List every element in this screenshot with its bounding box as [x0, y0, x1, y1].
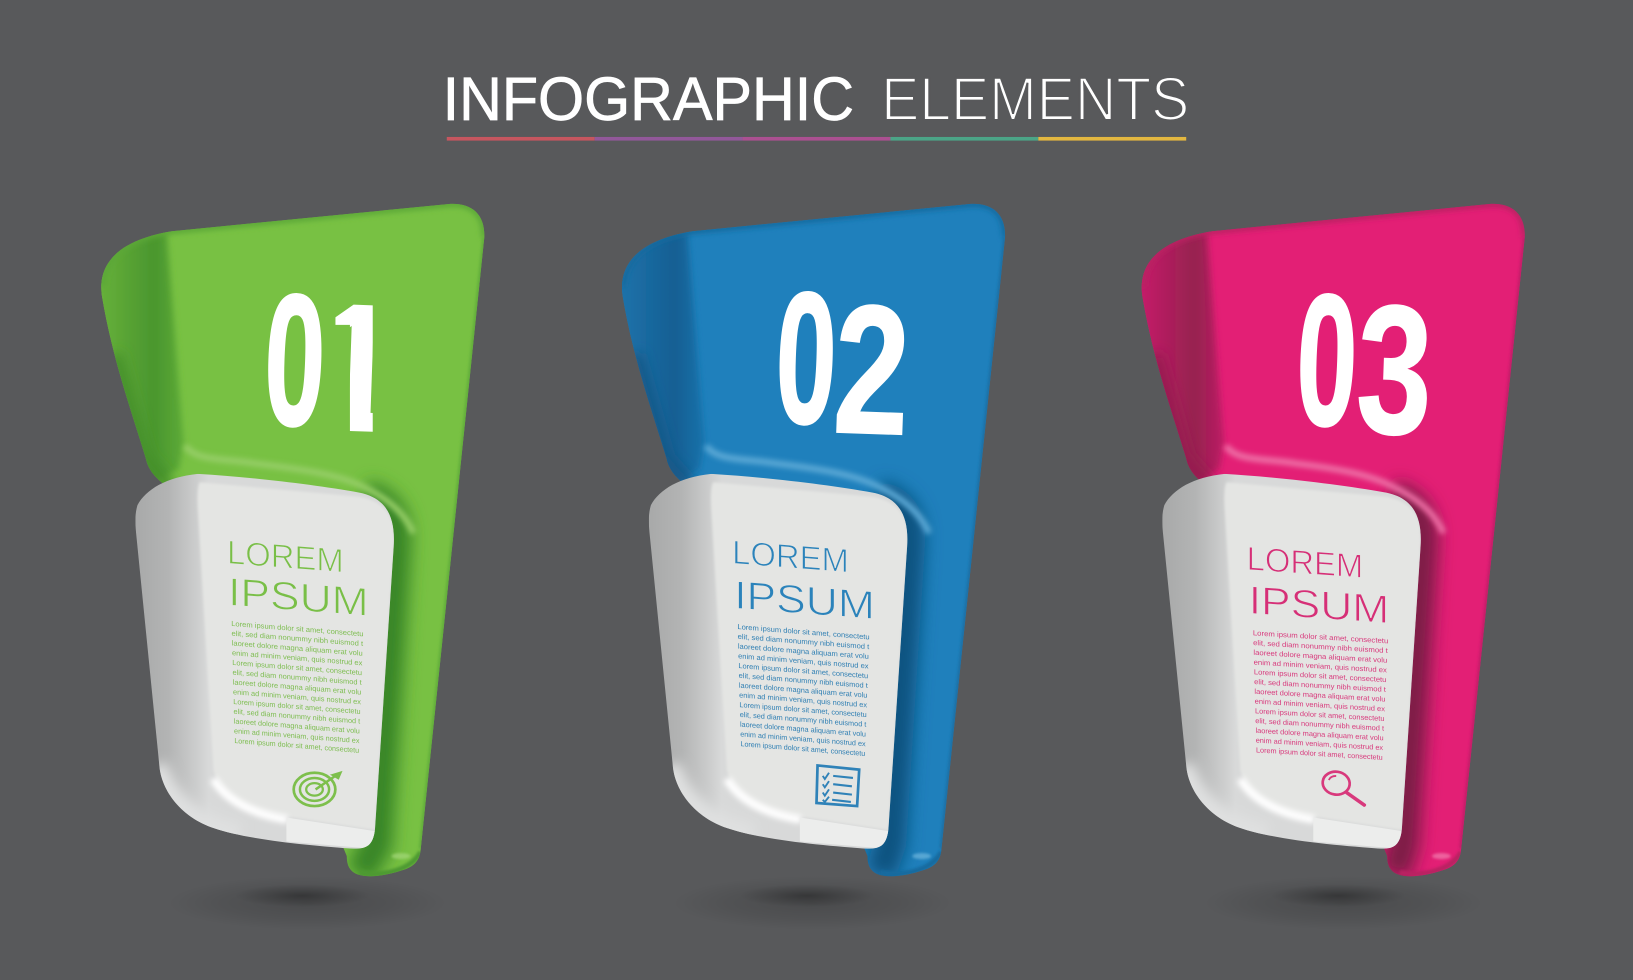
- title underline in four colours: [447, 137, 1186, 141]
- body text: elit, sed diam nonummy nibh euismod t: [234, 707, 360, 726]
- white card: [648, 474, 908, 849]
- body text: Lorem ipsum dolor sit amet, consectetu: [231, 619, 363, 638]
- heading: LOREM IPSUM: [227, 534, 369, 625]
- heading: LOREM IPSUM: IPSUM: [734, 573, 875, 628]
- body text: elit, sed diam nonummy nibh euismod t: [231, 629, 363, 648]
- heading: LOREM IPSUM: IPSUM: [1249, 578, 1389, 632]
- body text: Lorem ipsum dolor sit amet, consectetu: [738, 661, 868, 680]
- number 01: 0: [261, 255, 329, 466]
- floor shadow: [672, 876, 953, 930]
- body text: elit, sed diam nonummy nibh euismod t: [1253, 638, 1388, 655]
- body text: elit, sed diam nonummy nibh euismod t: [1255, 716, 1384, 733]
- number 02: [772, 253, 913, 474]
- body text: laoreet dolore magna aliquam erat volu: [233, 677, 361, 697]
- body text: Lorem ipsum dolor sit amet, consectetu: [737, 622, 870, 641]
- heading: LOREM IPSUM: LOREM: [732, 534, 849, 580]
- body text: Lorem ipsum dolor sit amet, consectetu: [1255, 706, 1385, 723]
- heading: LOREM IPSUM: IPSUM: [228, 570, 369, 625]
- body text: laoreet dolore magna aliquam erat volu: [738, 642, 869, 661]
- green tag body: [101, 204, 484, 876]
- body text: enim ad minim veniam, quis nostrud ex: [738, 651, 869, 671]
- icon: target with arrow: [294, 772, 342, 806]
- body text: [231, 619, 363, 755]
- heading: LOREM IPSUM: LOREM: [227, 534, 344, 580]
- body text: Lorem ipsum dolor sit amet, consectetu: [232, 658, 362, 677]
- body text: laoreet dolore magna aliquam erat volu: [739, 681, 867, 700]
- body text: laoreet dolore magna aliquam erat volu: [232, 638, 363, 658]
- number 03: 3: [1354, 267, 1436, 474]
- body text: Lorem ipsum dolor sit amet, consectetu: [1254, 667, 1386, 684]
- body text: enim ad minim veniam, quis nostrud ex: [1255, 697, 1385, 713]
- body text: laoreet dolore magna aliquam erat volu: [1254, 687, 1385, 704]
- panel 03: pink: [1142, 204, 1525, 916]
- body text: enim ad minim veniam, quis nostrud ex: [234, 726, 360, 745]
- body text: Lorem ipsum dolor sit amet, consectetu: [1253, 628, 1388, 645]
- number 03: [1293, 255, 1436, 474]
- body text: elit, sed diam nonummy nibh euismod t: [738, 632, 869, 651]
- floor shadow: [1203, 876, 1484, 930]
- body text: laoreet dolore magna aliquam erat volu: [1255, 726, 1384, 742]
- body text: enim ad minim veniam, quis nostrud ex: [1256, 736, 1383, 752]
- body text: Lorem ipsum dolor sit amet, consectetu: [740, 739, 865, 758]
- body text: Lorem ipsum dolor sit amet, consectetu: [1256, 745, 1383, 762]
- white card: [136, 474, 394, 849]
- icon: checklist: [816, 765, 859, 806]
- number 02: 2: [831, 267, 913, 474]
- body text: laoreet dolore magna aliquam erat volu: [740, 720, 866, 739]
- title: INFOGRAPHIC: INFOGRAPHIC: [443, 65, 854, 134]
- white card: [1162, 474, 1421, 849]
- body text: enim ad minim veniam, quis nostrud ex: [1254, 658, 1387, 674]
- heading: LOREM IPSUM: LOREM: [1247, 541, 1363, 586]
- heading: LOREM IPSUM: [732, 534, 875, 628]
- floor shadow: [167, 876, 448, 930]
- pink tag body: [1142, 204, 1525, 876]
- heading: LOREM IPSUM: [1247, 541, 1389, 632]
- body text: enim ad minim veniam, quis nostrud ex: [232, 648, 363, 667]
- panel 02: blue: [622, 204, 1006, 916]
- body text: elit, sed diam nonummy nibh euismod t: [1254, 677, 1386, 694]
- body text: Lorem ipsum dolor sit amet, consectetu: [233, 697, 361, 716]
- number 03: 0: [1293, 255, 1361, 466]
- body text: Lorem ipsum dolor sit amet, consectetu: [234, 736, 359, 755]
- body text: [1253, 628, 1388, 762]
- number 01: 1: [309, 264, 405, 472]
- body text: elit, sed diam nonummy nibh euismod t: [739, 671, 868, 690]
- blue tag body: [622, 204, 1006, 876]
- title: [443, 65, 1189, 134]
- body text: laoreet dolore magna aliquam erat volu: [1253, 648, 1387, 665]
- number 02: 0: [772, 253, 840, 464]
- body text: [737, 622, 870, 758]
- body text: laoreet dolore magna aliquam erat volu: [234, 716, 360, 735]
- body text: enim ad minim veniam, quis nostrud ex: [233, 687, 361, 706]
- number 01: [268, 293, 373, 432]
- body text: enim ad minim veniam, quis nostrud ex: [740, 729, 866, 748]
- body text: Lorem ipsum dolor sit amet, consectetu: [739, 700, 867, 719]
- body text: elit, sed diam nonummy nibh euismod t: [740, 710, 866, 729]
- body text: enim ad minim veniam, quis nostrud ex: [739, 690, 867, 709]
- body text: elit, sed diam nonummy nibh euismod t: [233, 668, 362, 687]
- icon: magnifying glass: [1321, 770, 1364, 805]
- title: ELEMENTS: ELEMENTS: [881, 65, 1189, 134]
- panel 01: green: [101, 204, 484, 916]
